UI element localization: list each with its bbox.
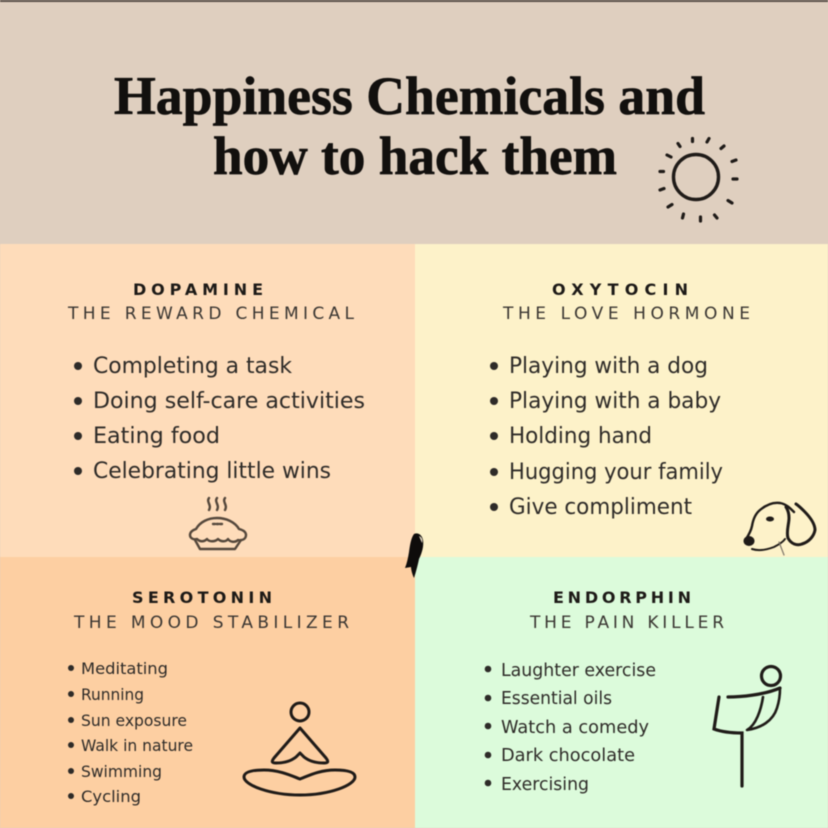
list: endorphin activities	[485, 660, 656, 795]
heading: oxytocin: THE LOVE HORMONE	[502, 304, 750, 324]
panel: serotonin	[0, 557, 415, 828]
heading: serotonin	[73, 588, 349, 633]
title: Happiness Chemicals and	[114, 66, 705, 126]
heading: dopamine: THE REWARD CHEMICAL	[67, 304, 355, 324]
heading: dopamine: DOPAMINE	[133, 280, 263, 299]
heading: oxytocin: OXYTOCIN	[552, 280, 688, 299]
panel: oxytocin	[415, 244, 828, 557]
list: endorphin activities: Essential oils	[501, 688, 612, 709]
icon: pie	[190, 498, 246, 549]
list: endorphin activities: Exercising	[501, 774, 589, 795]
list: oxytocin activities: Playing with a dog	[509, 354, 708, 379]
icon: sun	[660, 138, 737, 221]
list: dopamine activities: Celebrating little wins	[93, 459, 331, 484]
list: dopamine activities: Eating food	[93, 424, 220, 449]
list: serotonin activities	[68, 659, 193, 806]
title	[114, 66, 705, 186]
icon: meditating person	[244, 703, 355, 795]
icon: dog	[744, 503, 815, 555]
list: oxytocin activities: Holding hand	[509, 424, 652, 449]
panel: dopamine	[0, 244, 415, 557]
list: serotonin activities: Sun exposure	[81, 711, 187, 730]
list: serotonin activities: Running	[81, 685, 144, 704]
list: dopamine activities	[74, 354, 365, 484]
list: endorphin activities: Watch a comedy	[501, 717, 649, 738]
list: endorphin activities: Laughter exercise	[501, 660, 656, 681]
list: oxytocin activities: Playing with a baby	[509, 389, 721, 414]
title: how to hack them	[213, 126, 617, 186]
list: serotonin activities: Walk in nature	[81, 736, 193, 755]
list: dopamine activities: Completing a task	[93, 354, 292, 379]
list: dopamine activities: Doing self-care activities	[93, 389, 365, 414]
icon: stretching figure	[714, 666, 780, 786]
heading: dopamine	[67, 280, 355, 324]
heading: serotonin: THE MOOD STABILIZER	[73, 613, 349, 633]
list: oxytocin activities: Hugging your family	[509, 460, 723, 485]
heading: serotonin: SEROTONIN	[132, 588, 272, 607]
heading: endorphin: ENDORPHIN	[553, 588, 691, 607]
panel: endorphin	[415, 557, 828, 828]
list: serotonin activities: Swimming	[81, 762, 162, 781]
list: serotonin activities: Meditating	[81, 659, 168, 678]
list: serotonin activities: Cycling	[81, 787, 141, 806]
list: oxytocin activities: Give compliment	[509, 495, 692, 520]
heading: oxytocin	[502, 280, 750, 324]
heading: endorphin: THE PAIN KILLER	[529, 613, 724, 633]
list: endorphin activities: Dark chocolate	[501, 745, 635, 766]
panel: header	[0, 0, 828, 244]
list: oxytocin activities	[490, 354, 723, 520]
heading: endorphin	[529, 588, 724, 633]
icon: centre bird	[405, 533, 423, 578]
